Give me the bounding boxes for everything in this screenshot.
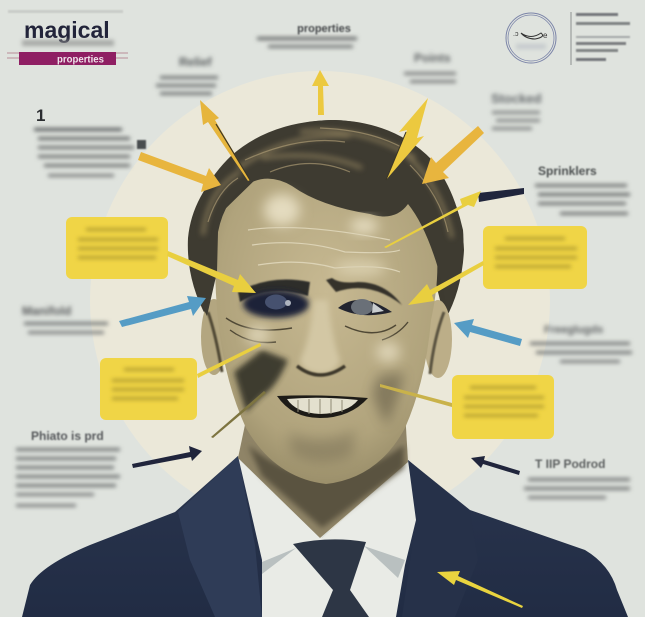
hair highlights: [203, 131, 452, 238]
subtitle: properties: [57, 54, 104, 66]
callout: upper right yellow box: [483, 226, 587, 289]
arrow: top centre: [312, 70, 329, 115]
nose: [297, 300, 345, 375]
hair strands: [208, 128, 448, 232]
callout: lower left yellow box: [100, 358, 197, 420]
suit jacket: [22, 456, 628, 617]
arrow: thin forehead: [384, 191, 481, 248]
portrait: [22, 120, 628, 617]
label: lower left: Phiato is prd: [31, 429, 104, 443]
blurred strip under title: [22, 40, 114, 46]
blurred strip above title: [8, 10, 123, 13]
arrow: blue right: [454, 319, 522, 346]
label: middle right: Freeglugds: [544, 324, 603, 336]
arrow: thin olive: [211, 391, 266, 438]
label: lower right: T IIP Podrod: [535, 457, 605, 471]
arrow: upper left thin: [200, 100, 250, 181]
face: [215, 175, 437, 484]
right eyebrow: [326, 278, 402, 305]
arrow: large orange left: [138, 152, 221, 192]
top centre caption: [257, 23, 357, 48]
left lapel: [178, 456, 262, 617]
right eye: [338, 299, 392, 315]
label: upper right caption: [491, 91, 542, 130]
label: lower right: [524, 457, 630, 499]
arrow: yellow on jacket: [437, 571, 523, 608]
title: magical: magical: [24, 17, 110, 43]
hair front: [189, 120, 463, 316]
arrow: lightning: [386, 98, 428, 180]
label: upper left caption: Relief: [179, 55, 213, 69]
mouth with teeth: [277, 395, 368, 418]
arrow: lower right box to cheek: [380, 384, 452, 407]
callout: upper left yellow box: [66, 217, 168, 279]
arrow: navy upper right: [478, 188, 524, 202]
label: right heading block: Sprinklers: [538, 164, 597, 178]
label: numbered text block: 1: [36, 106, 45, 125]
label: top right caption: [404, 51, 456, 83]
subtitle banner: [19, 52, 116, 65]
arrow: navy lower right: [471, 456, 520, 475]
cheek highlights: [246, 326, 270, 344]
left eye: [243, 290, 309, 318]
right lapel: [402, 460, 478, 617]
neck: [238, 410, 408, 538]
arrow: right yellow box to eye: [408, 261, 484, 305]
label: upper right caption: Stocked: [491, 91, 542, 106]
label: upper left caption: [156, 55, 218, 95]
arrow: blue left: [119, 296, 206, 327]
top centre caption: properties: [297, 23, 351, 35]
label: top right caption: Points: [414, 51, 451, 65]
hair back: [188, 120, 464, 320]
shirt and collar: [238, 456, 416, 617]
seal logo: .ɔ: [513, 31, 519, 38]
top right legend: [570, 12, 630, 65]
label: middle left: Manifold: [22, 304, 71, 318]
label: middle left: [22, 304, 108, 334]
arrow: large orange right: [422, 126, 484, 184]
cream circle behind portrait: [90, 71, 550, 531]
arrow: left yellow box to eye: [167, 251, 256, 293]
seal logo: [506, 13, 556, 63]
right ear: [424, 300, 452, 378]
arrow: lower left box to cheek: [197, 343, 261, 378]
callout: lower right yellow box: [452, 375, 554, 439]
arrow: navy lower left: [132, 446, 202, 468]
cheek shadows: [234, 350, 288, 412]
left ear: [201, 299, 227, 375]
necktie: [293, 539, 369, 617]
logo heading: [7, 10, 128, 66]
label: right heading block: [535, 164, 630, 215]
label: middle right: [530, 324, 632, 363]
side rules: [7, 53, 128, 58]
forehead wrinkles: [248, 228, 400, 272]
label: numbered text block: [34, 106, 146, 177]
seal logo: e: [543, 31, 548, 40]
left eyebrow: [238, 280, 310, 302]
forehead highlights: [264, 194, 300, 226]
label: lower left: [16, 429, 120, 507]
eye wrinkles: [226, 318, 408, 342]
